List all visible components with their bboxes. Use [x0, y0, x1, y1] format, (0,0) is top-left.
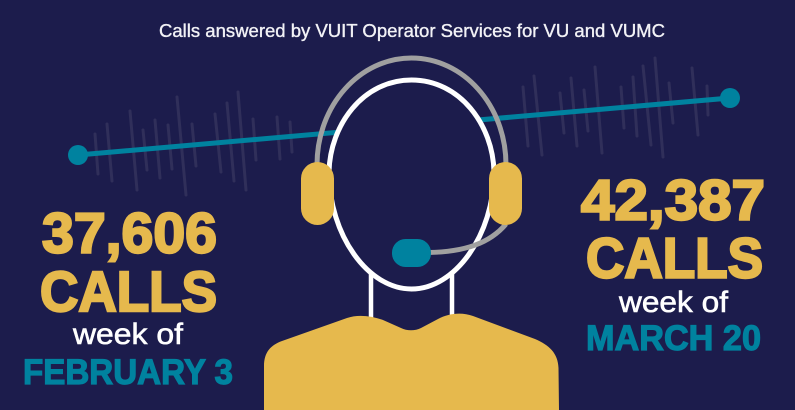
sound wave bars: left	[95, 92, 292, 195]
left ear cup	[301, 162, 334, 225]
right ear cup	[489, 162, 522, 225]
title: Calls answered by VUIT Operator Services for VU and VUMC	[159, 21, 665, 41]
right stat: March 20: MARCH 20	[586, 319, 761, 358]
sound wave bars: right	[523, 58, 708, 157]
teal trend line with endpoints	[68, 88, 740, 165]
left stat: February 3	[23, 202, 233, 392]
person illustration	[264, 58, 559, 410]
left stat: February 3: CALLS	[40, 260, 217, 324]
right stat: March 20: week of	[618, 286, 729, 319]
neck	[371, 270, 452, 322]
head outline	[329, 80, 494, 289]
left stat: February 3: week of	[72, 318, 184, 351]
right stat: March 20: CALLS	[586, 226, 763, 290]
microphone	[392, 239, 431, 267]
headband	[317, 58, 506, 165]
left stat: February 3: 37,606	[42, 202, 217, 266]
microphone arm	[428, 224, 506, 252]
right stat: March 20	[581, 168, 765, 358]
right stat: March 20: 42,387	[581, 168, 765, 232]
shoulders	[264, 314, 559, 410]
left stat: February 3: FEBRUARY 3	[23, 353, 233, 392]
